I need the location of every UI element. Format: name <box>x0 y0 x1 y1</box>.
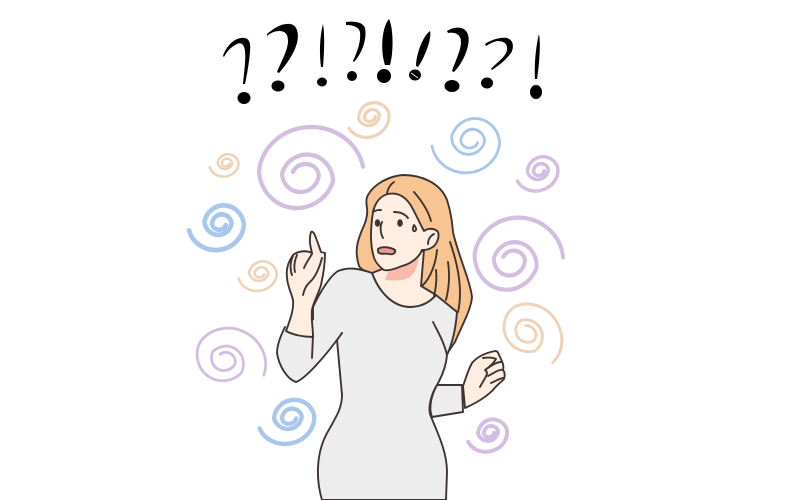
spiral: lilac bottom right <box>464 416 511 456</box>
punctuation marks row <box>223 19 542 104</box>
spiral: large lilac top <box>259 127 363 208</box>
spiral: blue bottom <box>255 396 319 449</box>
right sleeve <box>430 385 463 417</box>
right hand fist <box>463 351 505 408</box>
sweat drop <box>413 225 416 231</box>
woman figure <box>277 175 505 500</box>
hair <box>357 175 472 355</box>
spiral: tan right <box>495 292 574 376</box>
mouth <box>378 247 395 254</box>
eyes <box>375 219 403 227</box>
question mark 2 <box>267 24 298 91</box>
face <box>371 194 439 270</box>
left sleeve <box>277 320 342 382</box>
right fist fingers <box>480 358 504 387</box>
spiral: tan left small <box>209 153 240 178</box>
question mark 3 <box>346 22 366 81</box>
eyebrows and nose <box>373 210 408 238</box>
neck shadow <box>385 258 419 281</box>
dress detail line <box>433 322 447 355</box>
neck and chest <box>372 250 436 307</box>
spiral: lilac right small <box>513 153 563 196</box>
question mark 4 <box>444 28 469 92</box>
exclamation mark 4 <box>530 34 542 99</box>
spiral: lilac lower left <box>187 315 278 400</box>
spiral: large lilac right <box>472 214 566 295</box>
sleeve fill <box>277 320 342 382</box>
ear detail <box>428 234 434 244</box>
exclamation mark 2 <box>377 19 393 83</box>
spiral: tan top <box>343 98 394 143</box>
left arm and raised hand <box>286 232 325 337</box>
spiral: blue left <box>187 204 246 252</box>
spiral: tan middle left <box>237 260 278 293</box>
question mark 1 <box>223 38 250 104</box>
hair strands <box>387 182 460 312</box>
exclamation mark 1 <box>317 24 327 86</box>
dress body <box>313 269 457 500</box>
left hand details <box>291 254 322 295</box>
spiral: blue top right <box>432 119 500 173</box>
sleeve outline <box>277 327 342 382</box>
question mark 5 <box>481 38 513 88</box>
exclamation mark 3 <box>409 31 430 80</box>
